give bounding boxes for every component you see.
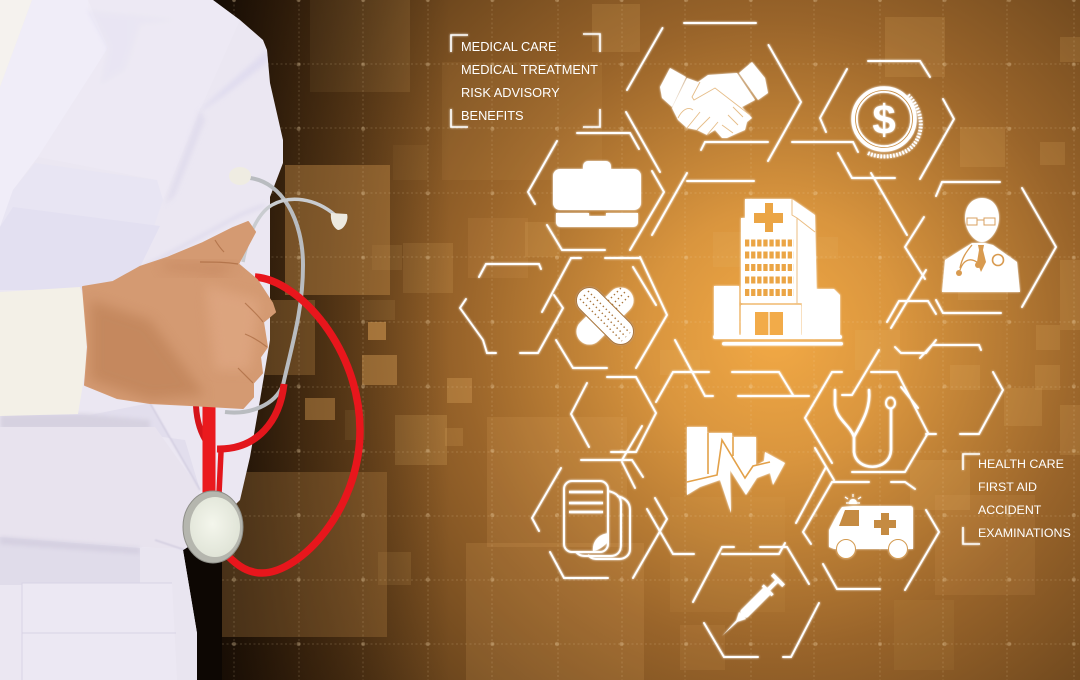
text block: health care list: FIRST AID bbox=[978, 480, 1037, 494]
corner brackets bbox=[963, 454, 980, 544]
icon: ambulance bbox=[829, 494, 913, 558]
hand bbox=[83, 222, 275, 408]
icon: bandage bbox=[571, 282, 639, 350]
text block: medical services list: BENEFITS bbox=[461, 108, 524, 123]
coat shading bbox=[0, 0, 268, 680]
icon: chart with arrow bbox=[687, 427, 785, 513]
hexagon: documents bbox=[532, 468, 694, 578]
hexagon: ambulance bbox=[796, 448, 939, 590]
corner brackets bbox=[451, 34, 600, 127]
text block: health care list: EXAMINATIONS bbox=[978, 526, 1071, 540]
background: translucent squares bbox=[310, 0, 1080, 680]
icon: hospital building bbox=[713, 199, 843, 346]
ear tips bbox=[229, 167, 251, 185]
hexagon: syringe bbox=[693, 543, 819, 657]
icon: doctor bbox=[942, 198, 1020, 292]
red tubing loop bbox=[228, 277, 360, 573]
hexagon: handshake bbox=[626, 23, 801, 172]
background: black strip behind coat bbox=[180, 545, 222, 680]
icon: syringe bbox=[716, 573, 785, 642]
shirt cuff bbox=[0, 287, 86, 416]
background: dark left falloff bbox=[190, 0, 450, 680]
hexagon: briefcase bbox=[528, 133, 664, 250]
text block: medical services list: MEDICAL TREATMENT bbox=[461, 62, 598, 77]
background: grid nodes bbox=[222, 0, 1080, 680]
icon: documents bbox=[564, 481, 630, 559]
white coat bbox=[0, 0, 283, 680]
text block: health care list: ACCIDENT bbox=[978, 503, 1042, 517]
doctor figure bbox=[0, 0, 283, 680]
stethoscope bbox=[83, 167, 360, 573]
text block: health care list bbox=[963, 454, 1071, 544]
text block: health care list: HEALTH CARE bbox=[978, 457, 1064, 471]
text block: medical services list: RISK ADVISORY bbox=[461, 85, 560, 100]
background: dotted grid bbox=[222, 0, 1080, 680]
text block: medical services list: MEDICAL CARE bbox=[461, 39, 557, 54]
hexagon network lines bbox=[460, 23, 1056, 657]
icon: handshake bbox=[660, 62, 768, 138]
text block: medical services list bbox=[451, 34, 600, 127]
red Y tubing bbox=[196, 384, 284, 494]
background: squares near coat bbox=[222, 165, 397, 637]
icon: stethoscope bbox=[835, 390, 895, 467]
hexagon: hospital bbox=[652, 173, 907, 402]
chest piece bbox=[183, 491, 243, 563]
hexagon: stethoscope bbox=[805, 340, 1003, 472]
hexagon: chart side bbox=[571, 377, 656, 488]
icon: dollar coin bbox=[854, 90, 921, 156]
hexagon: doctor bbox=[887, 182, 1056, 328]
hexagon: bandage bbox=[460, 257, 667, 368]
silver tubing bbox=[225, 178, 303, 413]
icon: briefcase bbox=[553, 161, 641, 227]
hexagon: dollar coin bbox=[792, 61, 954, 179]
icon: dollar coin: $ bbox=[872, 96, 896, 143]
